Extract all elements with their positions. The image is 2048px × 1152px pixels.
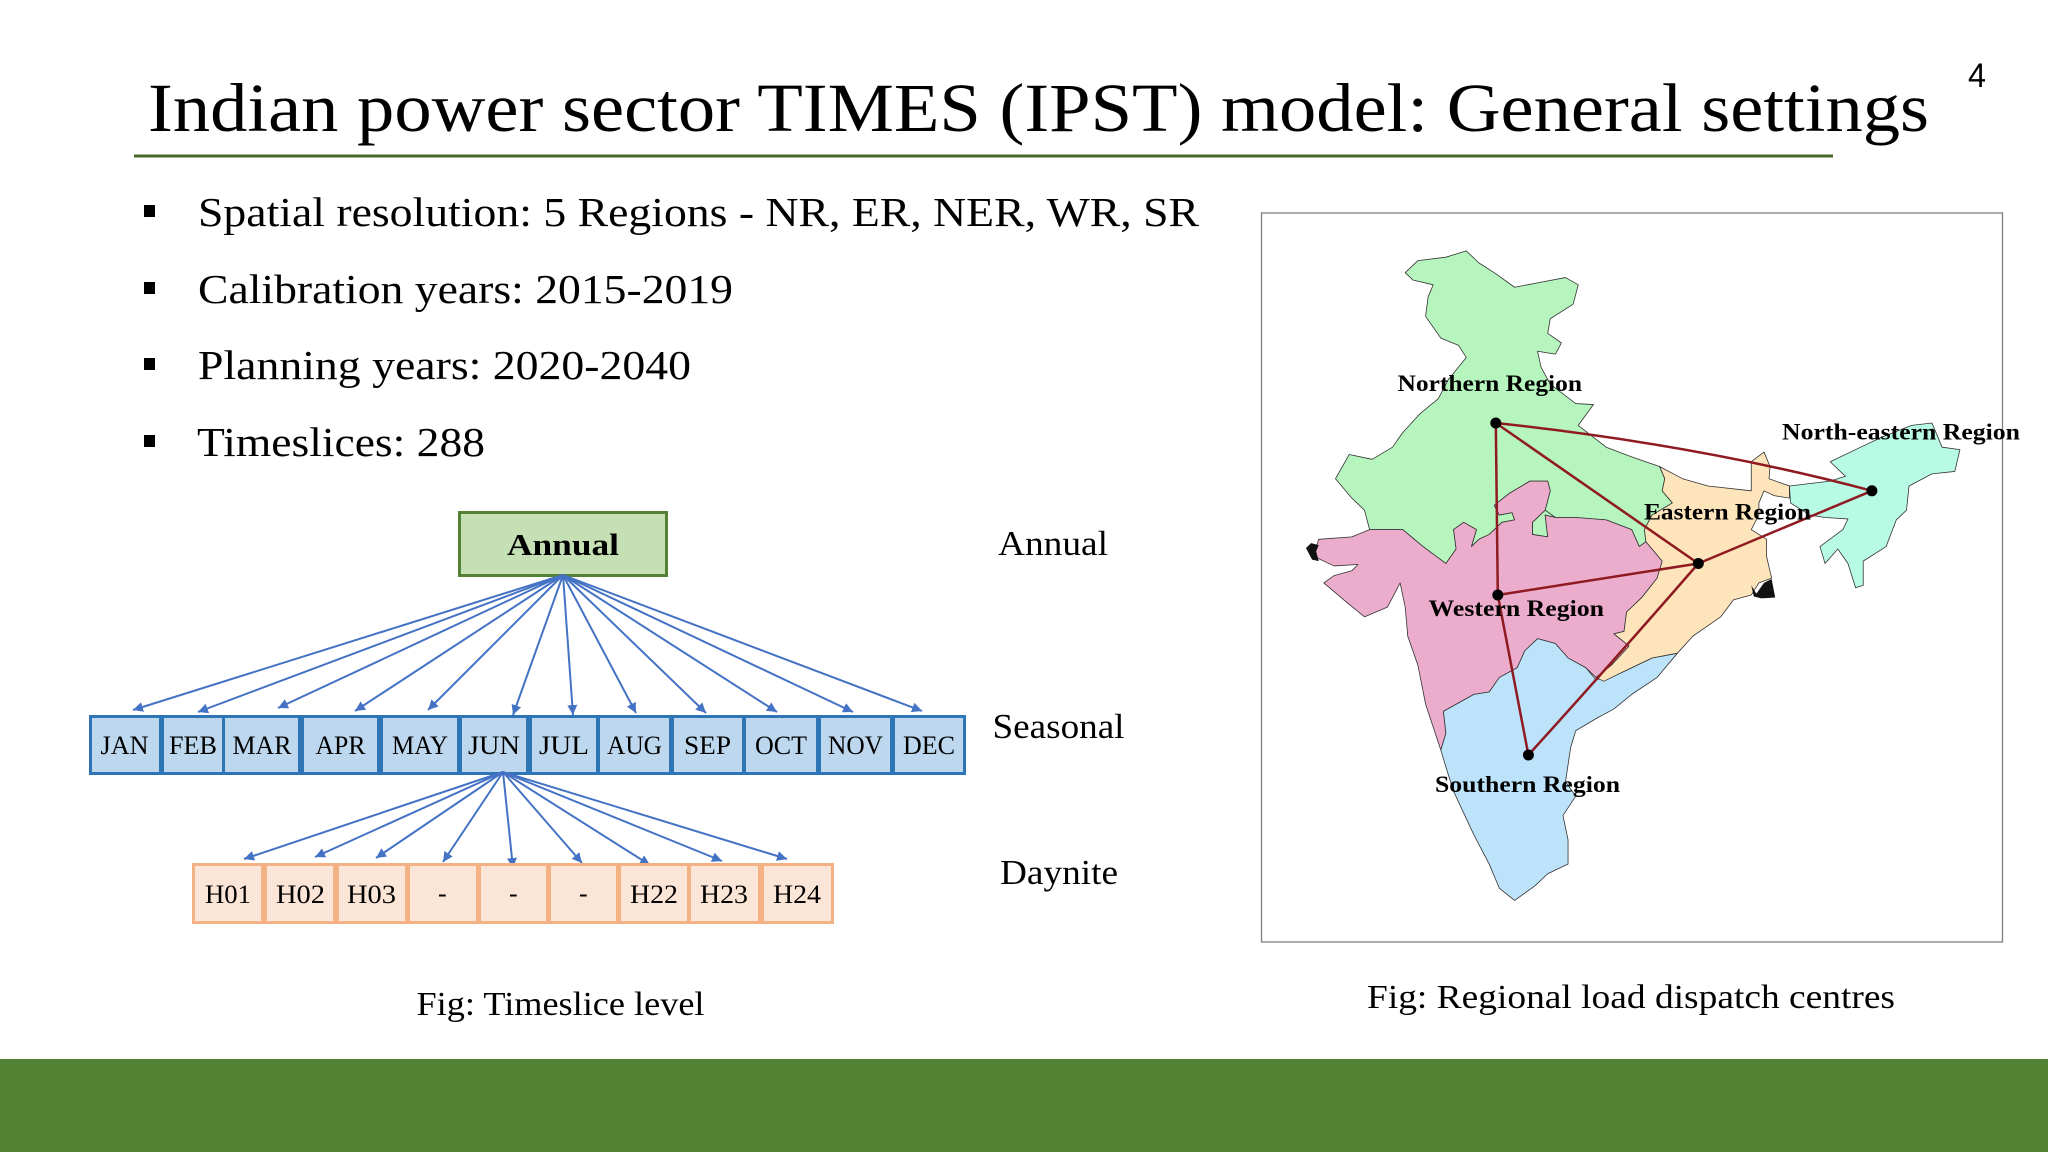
coastal detail: kutch [1306, 543, 1319, 561]
arrows: june to hours [244, 772, 787, 868]
month boxes: MAR [232, 731, 292, 760]
month boxes [90, 716, 964, 774]
hour boxes: - [579, 879, 588, 908]
month boxes: FEB [169, 731, 217, 760]
title: Indian power sector TIMES (IPST) model: General settings [148, 70, 1929, 146]
page number: 4 [1968, 57, 1986, 95]
month boxes: DEC [903, 731, 955, 760]
bullet: spatial resolution: Spatial resolution: 5 Regions - NR, ER, NER, WR, SR [198, 189, 1200, 235]
caption: regional load dispatch centres: Fig: Regional load dispatch centres [1367, 979, 1895, 1016]
hour boxes: H24 [773, 880, 821, 909]
hour boxes: - [509, 879, 518, 908]
coastal detail: sundarbans [1751, 579, 1775, 598]
month boxes: MAY [392, 731, 448, 760]
month boxes: JUL [539, 731, 589, 760]
hour boxes: H23 [700, 880, 748, 909]
hour boxes [194, 864, 832, 922]
region: western [1314, 481, 1662, 750]
title underline [134, 154, 1833, 158]
bullet: timeslices: Timeslices: 288 [197, 419, 485, 465]
level label: daynite: Daynite [1000, 853, 1118, 892]
label: southern region: Southern Region [1435, 772, 1620, 797]
level label: annual: Annual [998, 524, 1108, 563]
dispatch centre nodes [1490, 418, 1877, 760]
month boxes: JUN [468, 731, 520, 760]
month boxes: APR [316, 731, 366, 760]
month boxes: OCT [755, 731, 807, 760]
hour boxes: H22 [630, 880, 678, 909]
region: green enclave [1532, 510, 1555, 537]
annual box: Annual [507, 527, 619, 562]
hour boxes: H01 [205, 880, 251, 909]
label: western region: Western Region [1428, 596, 1604, 621]
month boxes: AUG [607, 731, 662, 760]
label: north-eastern region: North-eastern Region [1782, 420, 2020, 444]
region: eastern [1596, 452, 1789, 681]
bullet list [144, 189, 1200, 465]
bullet: calibration years: Calibration years: 2015-2019 [198, 266, 733, 312]
region: north-eastern [1789, 423, 1960, 588]
region: southern [1441, 639, 1677, 900]
hour boxes: - [438, 879, 447, 908]
transmission lines [1496, 423, 1872, 755]
month boxes: JAN [100, 731, 149, 760]
hour boxes: H03 [347, 880, 396, 909]
arrows: annual to months [133, 575, 922, 715]
label: eastern region: Eastern Region [1644, 500, 1811, 524]
caption: timeslice level: Fig: Timeslice level [416, 986, 704, 1023]
india regions [1306, 251, 1960, 900]
label: northern region: Northern Region [1398, 371, 1582, 396]
level label: seasonal: Seasonal [992, 707, 1125, 746]
timeslice diagram [90, 512, 964, 922]
annual box [460, 512, 666, 576]
bullet: planning years: Planning years: 2020-2040 [198, 342, 691, 388]
month boxes: SEP [684, 731, 731, 760]
map panel [1262, 213, 2020, 942]
footer bar [0, 1059, 2048, 1152]
month boxes: NOV [828, 731, 883, 760]
region: northern [1335, 251, 1672, 564]
map frame [1262, 213, 2002, 942]
hour boxes: H02 [276, 880, 325, 909]
